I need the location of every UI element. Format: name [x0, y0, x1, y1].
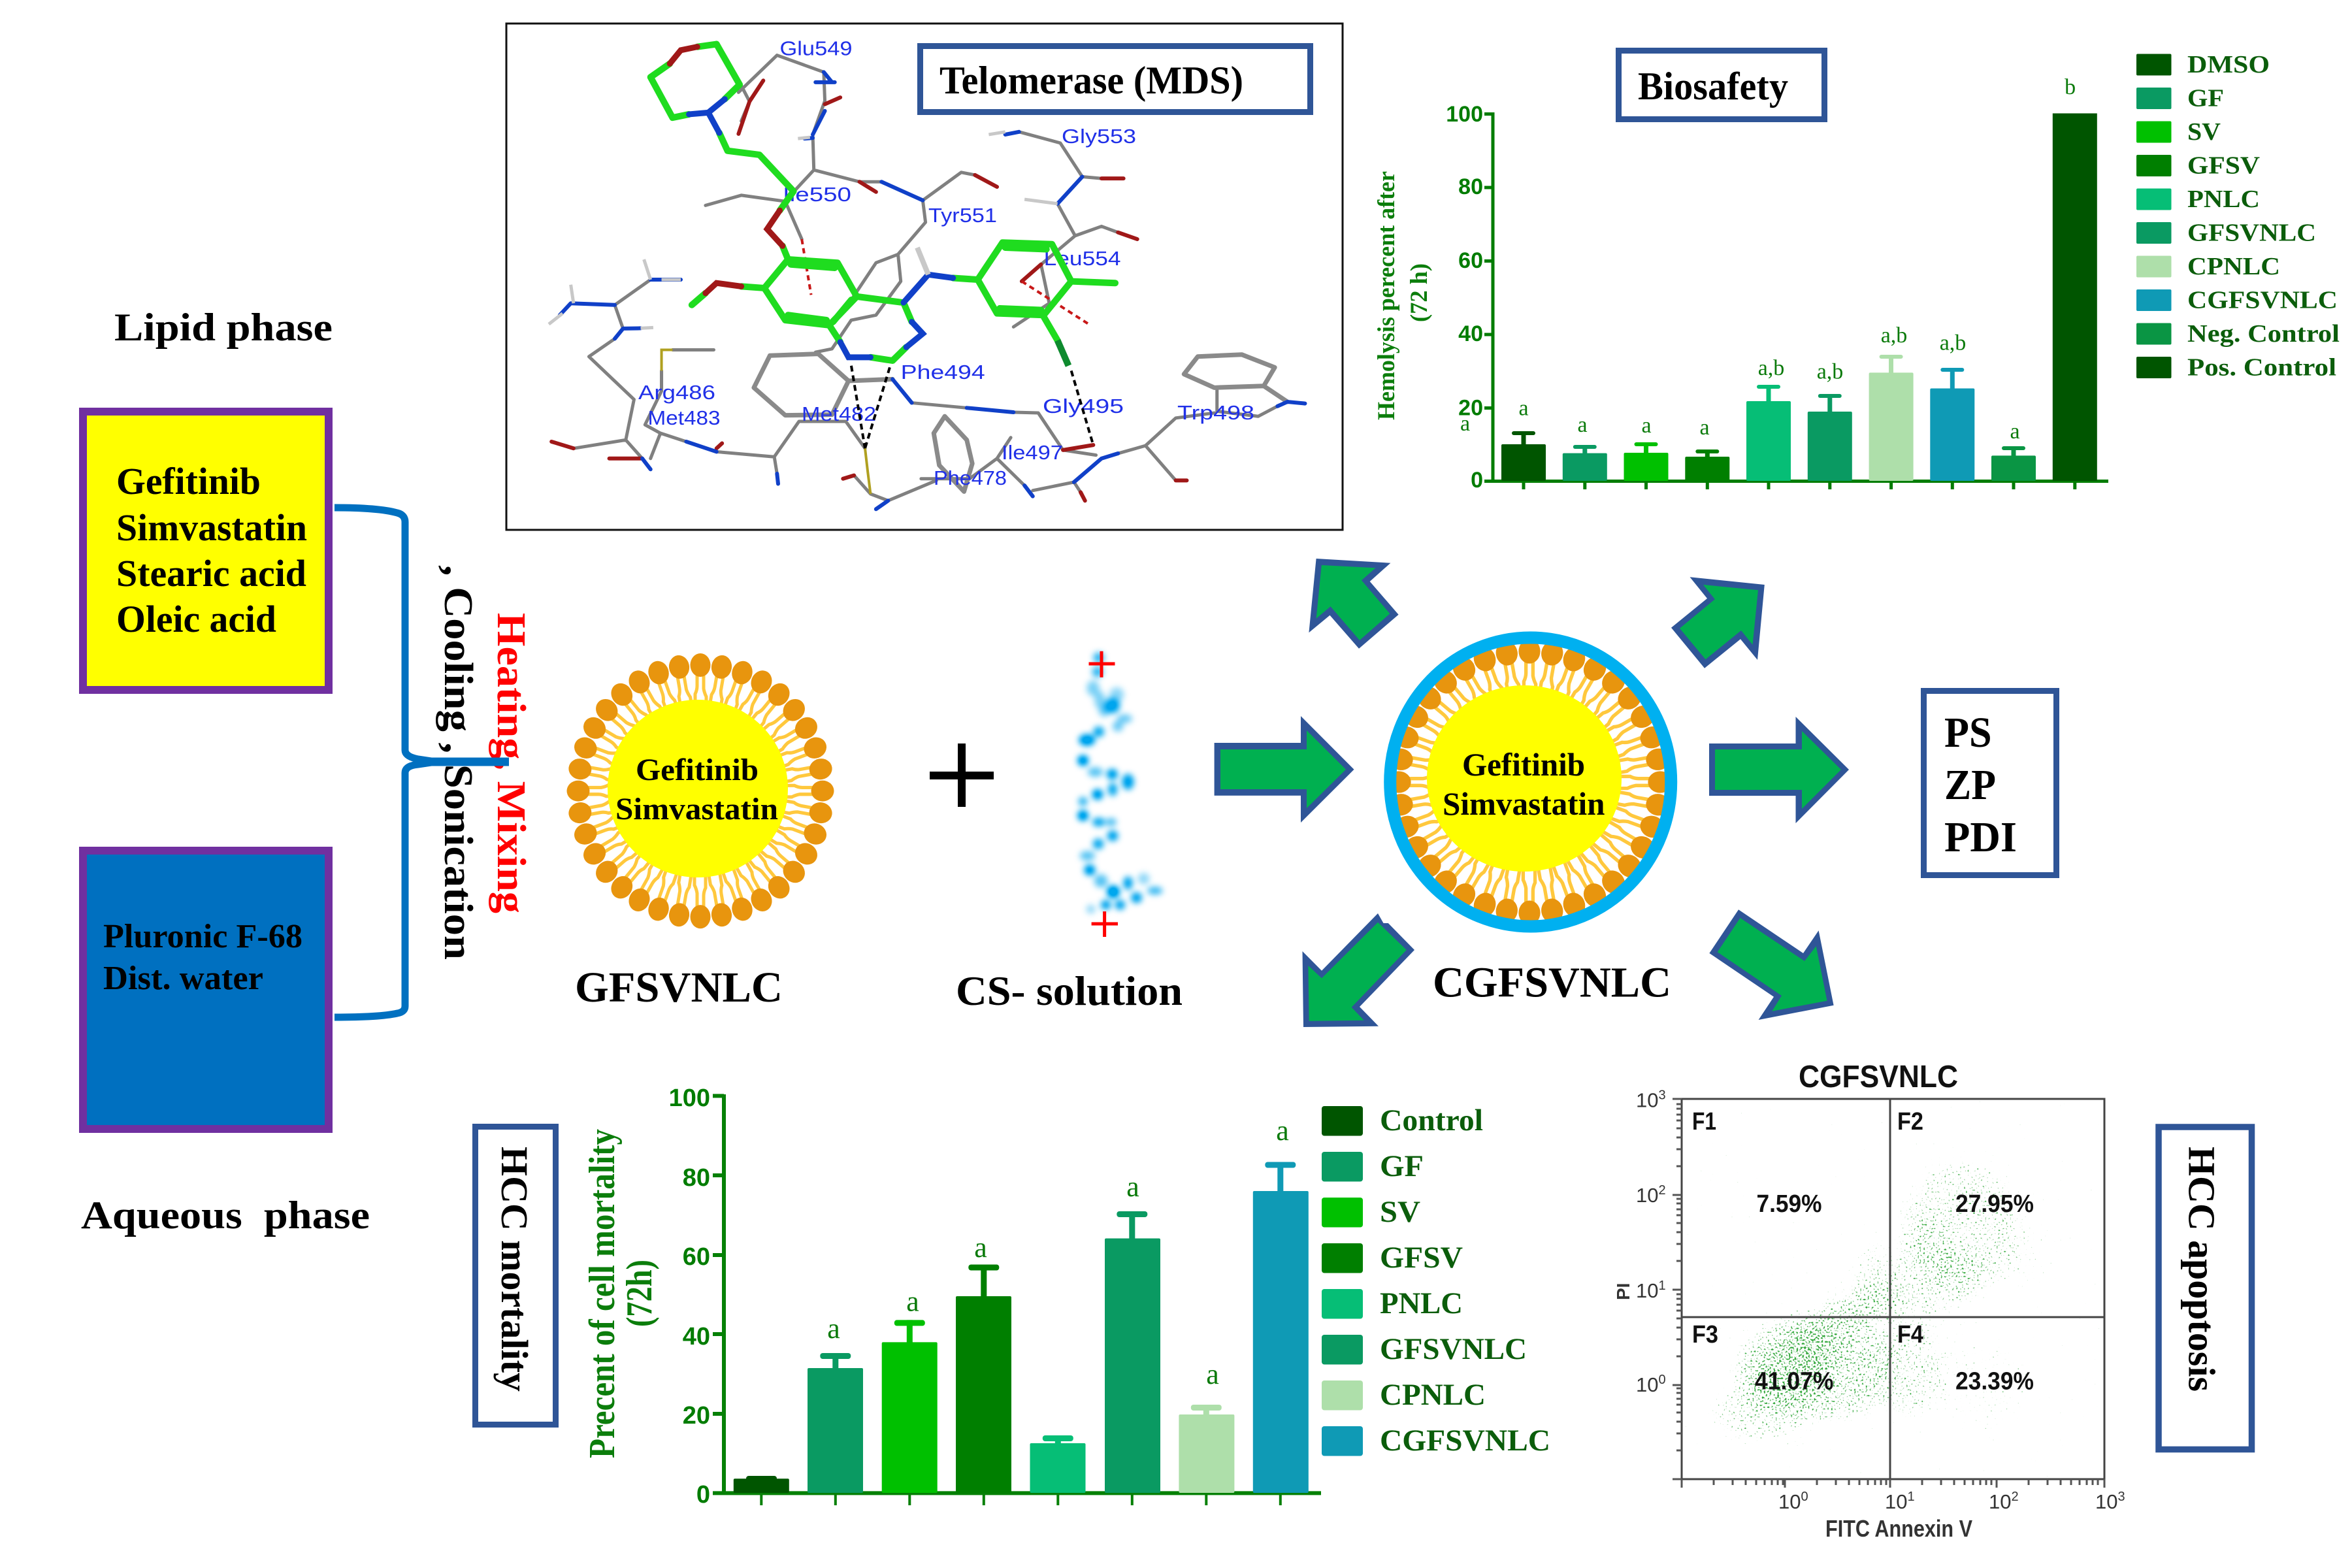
residue labels: Glu549 [780, 37, 852, 60]
y axis labels: 10 [1636, 1279, 1658, 1302]
y axis tick labels: 100 [1446, 102, 1483, 127]
heading: Lipid phase: Lipid phase [114, 306, 333, 349]
significance letters: a,b [1817, 359, 1843, 384]
arrow: to HCC apoptosis [1709, 909, 1834, 1020]
bars [734, 1162, 1309, 1493]
icon: CGFSVNLC chitosan-coated nanoparticle: Simvastatin [1443, 785, 1605, 822]
y axis tick labels: 80 [1458, 174, 1483, 199]
y axis title [1373, 171, 1433, 420]
label: CS- solution: CS- solution [956, 968, 1183, 1014]
panel: aqueous phase ingredients: Pluronic F-68 [103, 918, 302, 955]
y axis tick labels: 20 [683, 1402, 710, 1429]
heading: Aqueous phase: Aqueous phase [81, 1194, 370, 1237]
x axis labels: 10 [1885, 1490, 1907, 1513]
axes [713, 1094, 1321, 1495]
x axis title: FITC Annexin V [1825, 1515, 1972, 1542]
significance letters: a,b [1940, 331, 1966, 355]
residue labels: Met482 [802, 402, 876, 425]
significance letters: a [1276, 1115, 1289, 1147]
legend: biosafety: GFSV [2187, 152, 2261, 179]
significance letters: a [1460, 412, 1470, 436]
panel: lipid phase ingredients: Oleic acid [116, 598, 276, 640]
y axis labels [1636, 1088, 1666, 1396]
panel: PS ZP PDI: PS [1944, 709, 1991, 757]
y axis labels: 1 [1658, 1279, 1666, 1293]
label: CGFSVNLC: CGFSVNLC [1433, 959, 1671, 1007]
significance letters: a [1577, 413, 1588, 437]
legend: biosafety: GFSVNLC [2187, 220, 2316, 247]
y axis tick labels: 60 [1458, 248, 1483, 273]
y axis labels: 10 [1636, 1089, 1658, 1112]
quadrant labels and percentages: F2 [1897, 1108, 1923, 1135]
significance letters: a [1126, 1171, 1139, 1203]
significance letters: a,b [1881, 323, 1907, 348]
label: GFSVNLC: GFSVNLC [575, 964, 783, 1011]
y axis tick labels: 0 [696, 1481, 710, 1509]
legend: biosafety: Pos. Control [2187, 354, 2336, 382]
legend: HCC mortality: PNLC [1380, 1286, 1463, 1320]
y axis labels: 3 [1658, 1088, 1666, 1103]
y axis tick labels: 40 [683, 1323, 710, 1350]
chart: flow cytometry scatter plot [1613, 1060, 2125, 1542]
legend: biosafety: SV [2187, 118, 2221, 146]
panel: PS ZP PDI: ZP [1944, 761, 1996, 809]
box: HCC apoptosis: HCC apoptosis [2181, 1147, 2223, 1392]
icon: chitosan chain [1077, 651, 1162, 937]
y axis tick labels: 20 [1458, 396, 1483, 421]
icon: plus sign [930, 743, 994, 807]
panel: lipid phase ingredients [83, 412, 329, 690]
quadrant labels and percentages: 27.95% [1955, 1190, 2034, 1218]
x axis labels: 1 [1907, 1490, 1915, 1504]
y axis title: (72 h) [1406, 263, 1433, 322]
residue labels: Trp498 [1177, 401, 1254, 424]
axes [1484, 112, 2108, 489]
quadrant labels and percentages: 23.39% [1955, 1368, 2034, 1396]
x axis labels: 10 [2095, 1490, 2117, 1513]
box: HCC apoptosis [2159, 1127, 2251, 1449]
y axis title: PI: PI [1613, 1283, 1633, 1300]
significance letters: a [2010, 419, 2020, 444]
significance letters [827, 1115, 1289, 1390]
y axis labels: 10 [1636, 1184, 1658, 1207]
plot frame and quadrant lines [1682, 1099, 2104, 1479]
icon: CGFSVNLC chitosan-coated nanoparticle: Gefitinib [1462, 746, 1585, 783]
panel: lipid phase ingredients: Stearic acid [116, 552, 306, 595]
x axis labels: 3 [2117, 1490, 2125, 1504]
legend: biosafety: CGFSVNLC [2187, 286, 2338, 314]
significance letters: a [827, 1313, 840, 1345]
y axis labels: 10 [1636, 1373, 1658, 1396]
box: Biosafety [1619, 51, 1824, 119]
residue labels: Phe494 [901, 361, 985, 384]
y axis tick labels: 40 [1458, 321, 1483, 346]
process label: Cooling, Sonication: , Cooling , Sonication [436, 565, 480, 960]
significance letters: a [1699, 416, 1710, 440]
arrow: to biosafety [1671, 577, 1765, 668]
residue labels [638, 37, 1254, 489]
arrow: CS solution to CGFSVNLC [1215, 716, 1354, 823]
molecule: receptor residues [549, 56, 1305, 509]
legend: biosafety: GF [2187, 85, 2224, 112]
legend: biosafety: PNLC [2187, 186, 2260, 213]
x axis labels: 2 [2011, 1490, 2019, 1504]
panel: PS ZP PDI [1923, 691, 2057, 875]
residue labels: Ile550 [783, 183, 851, 206]
quadrant labels and percentages [1692, 1108, 2034, 1396]
residue labels: Tyr551 [928, 204, 997, 227]
panel: lipid phase ingredients: Simvastatin [116, 506, 307, 549]
y axis labels: 0 [1658, 1373, 1666, 1387]
process label: Heating, Mixing: Heating, Mixing [489, 613, 533, 913]
molecule: gefitinib ligand [651, 44, 1115, 448]
legend: biosafety: Neg. Control [2187, 320, 2340, 348]
significance letters: a [1641, 414, 1652, 438]
legend: HCC mortality: CPNLC [1380, 1378, 1486, 1412]
icon: GFSVNLC nanoparticle: Gefitinib [636, 753, 759, 787]
residue labels: Met483 [648, 406, 720, 429]
residue labels: Phe478 [934, 466, 1007, 489]
legend: HCC mortality: GFSVNLC [1380, 1332, 1527, 1366]
quadrant labels and percentages: F3 [1692, 1321, 1718, 1348]
box: Biosafety: Biosafety [1638, 65, 1788, 108]
arrow: to telomerase [1309, 559, 1399, 649]
plot title: CGFSVNLC [1799, 1060, 1958, 1094]
scatter dots [1712, 1160, 2044, 1439]
y axis title [582, 1129, 660, 1458]
y axis title: Hemolysis perecent after [1373, 171, 1400, 420]
x axis labels: 10 [1989, 1490, 2011, 1513]
y axis tick labels: 80 [683, 1164, 710, 1192]
significance letters: a [974, 1232, 987, 1264]
box: Telomerase (MDS) [920, 46, 1311, 112]
y axis tick labels [1446, 102, 1483, 493]
icon: GFSVNLC nanoparticle [567, 653, 834, 928]
arrow: to PS ZP PDI [1709, 717, 1849, 823]
brace joining phases [335, 508, 509, 1017]
residue labels: Ile497 [1002, 441, 1063, 464]
quadrant labels and percentages: 41.07% [1755, 1368, 1833, 1396]
panel: telomerase molecular docking [506, 24, 1343, 530]
x axis labels: 0 [1801, 1490, 1808, 1504]
legend: HCC mortality: GF [1380, 1149, 1424, 1183]
y axis tick labels: 60 [683, 1243, 710, 1271]
y axis tick labels [669, 1085, 710, 1509]
x axis labels: 10 [1778, 1490, 1801, 1513]
box: HCC mortality [476, 1126, 555, 1424]
y axis tick labels: 100 [669, 1085, 710, 1112]
panel: PS ZP PDI: PDI [1944, 813, 2017, 861]
residue labels: Arg486 [638, 381, 715, 404]
legend: biosafety: DMSO [2187, 51, 2270, 78]
arrow: to HCC mortality [1303, 913, 1414, 1027]
significance letters: a [1206, 1358, 1219, 1390]
residue labels: Leu554 [1044, 247, 1121, 270]
icon: CGFSVNLC chitosan-coated nanoparticle [1386, 638, 1673, 926]
significance letters: a [1518, 397, 1529, 421]
x axis labels [1778, 1490, 2125, 1513]
bars [1501, 114, 2097, 481]
legend: biosafety [2136, 51, 2340, 382]
y axis labels: 2 [1658, 1183, 1666, 1198]
significance letters: b [2065, 75, 2076, 99]
residue labels: Gly495 [1043, 395, 1124, 417]
y axis title: Precent of cell mortality [582, 1129, 623, 1458]
quadrant labels and percentages: 7.59% [1756, 1190, 1821, 1218]
y axis title: (72h) [619, 1260, 660, 1327]
legend: biosafety: CPNLC [2187, 253, 2280, 280]
bar chart: HCC cell mortality [582, 1085, 1321, 1509]
panel: aqueous phase ingredients [83, 851, 329, 1129]
legend: HCC mortality: Control [1380, 1103, 1483, 1137]
legend: HCC mortality: SV [1380, 1195, 1420, 1229]
significance letters: a,b [1758, 356, 1784, 380]
quadrant labels and percentages: F1 [1692, 1108, 1716, 1135]
significance letters: a [906, 1286, 919, 1318]
significance letters [1460, 75, 2076, 444]
bar chart: hemolysis biosafety [1373, 75, 2108, 493]
box: Telomerase (MDS): Telomerase (MDS) [939, 59, 1243, 102]
icon: GFSVNLC nanoparticle: Simvastatin [615, 792, 778, 826]
y axis tick labels: 0 [1471, 468, 1483, 493]
residue labels: Gly553 [1062, 125, 1136, 148]
panel: lipid phase ingredients: Gefitinib [116, 460, 261, 502]
legend: HCC mortality: CGFSVNLC [1380, 1424, 1550, 1458]
axis ticks [1673, 1099, 2104, 1488]
box: HCC mortality: HCC mortality [493, 1147, 536, 1392]
quadrant labels and percentages: F4 [1897, 1321, 1923, 1348]
legend: HCC mortality [1322, 1103, 1550, 1458]
panel: aqueous phase ingredients: Dist. water [103, 960, 263, 997]
legend: HCC mortality: GFSV [1380, 1241, 1463, 1275]
